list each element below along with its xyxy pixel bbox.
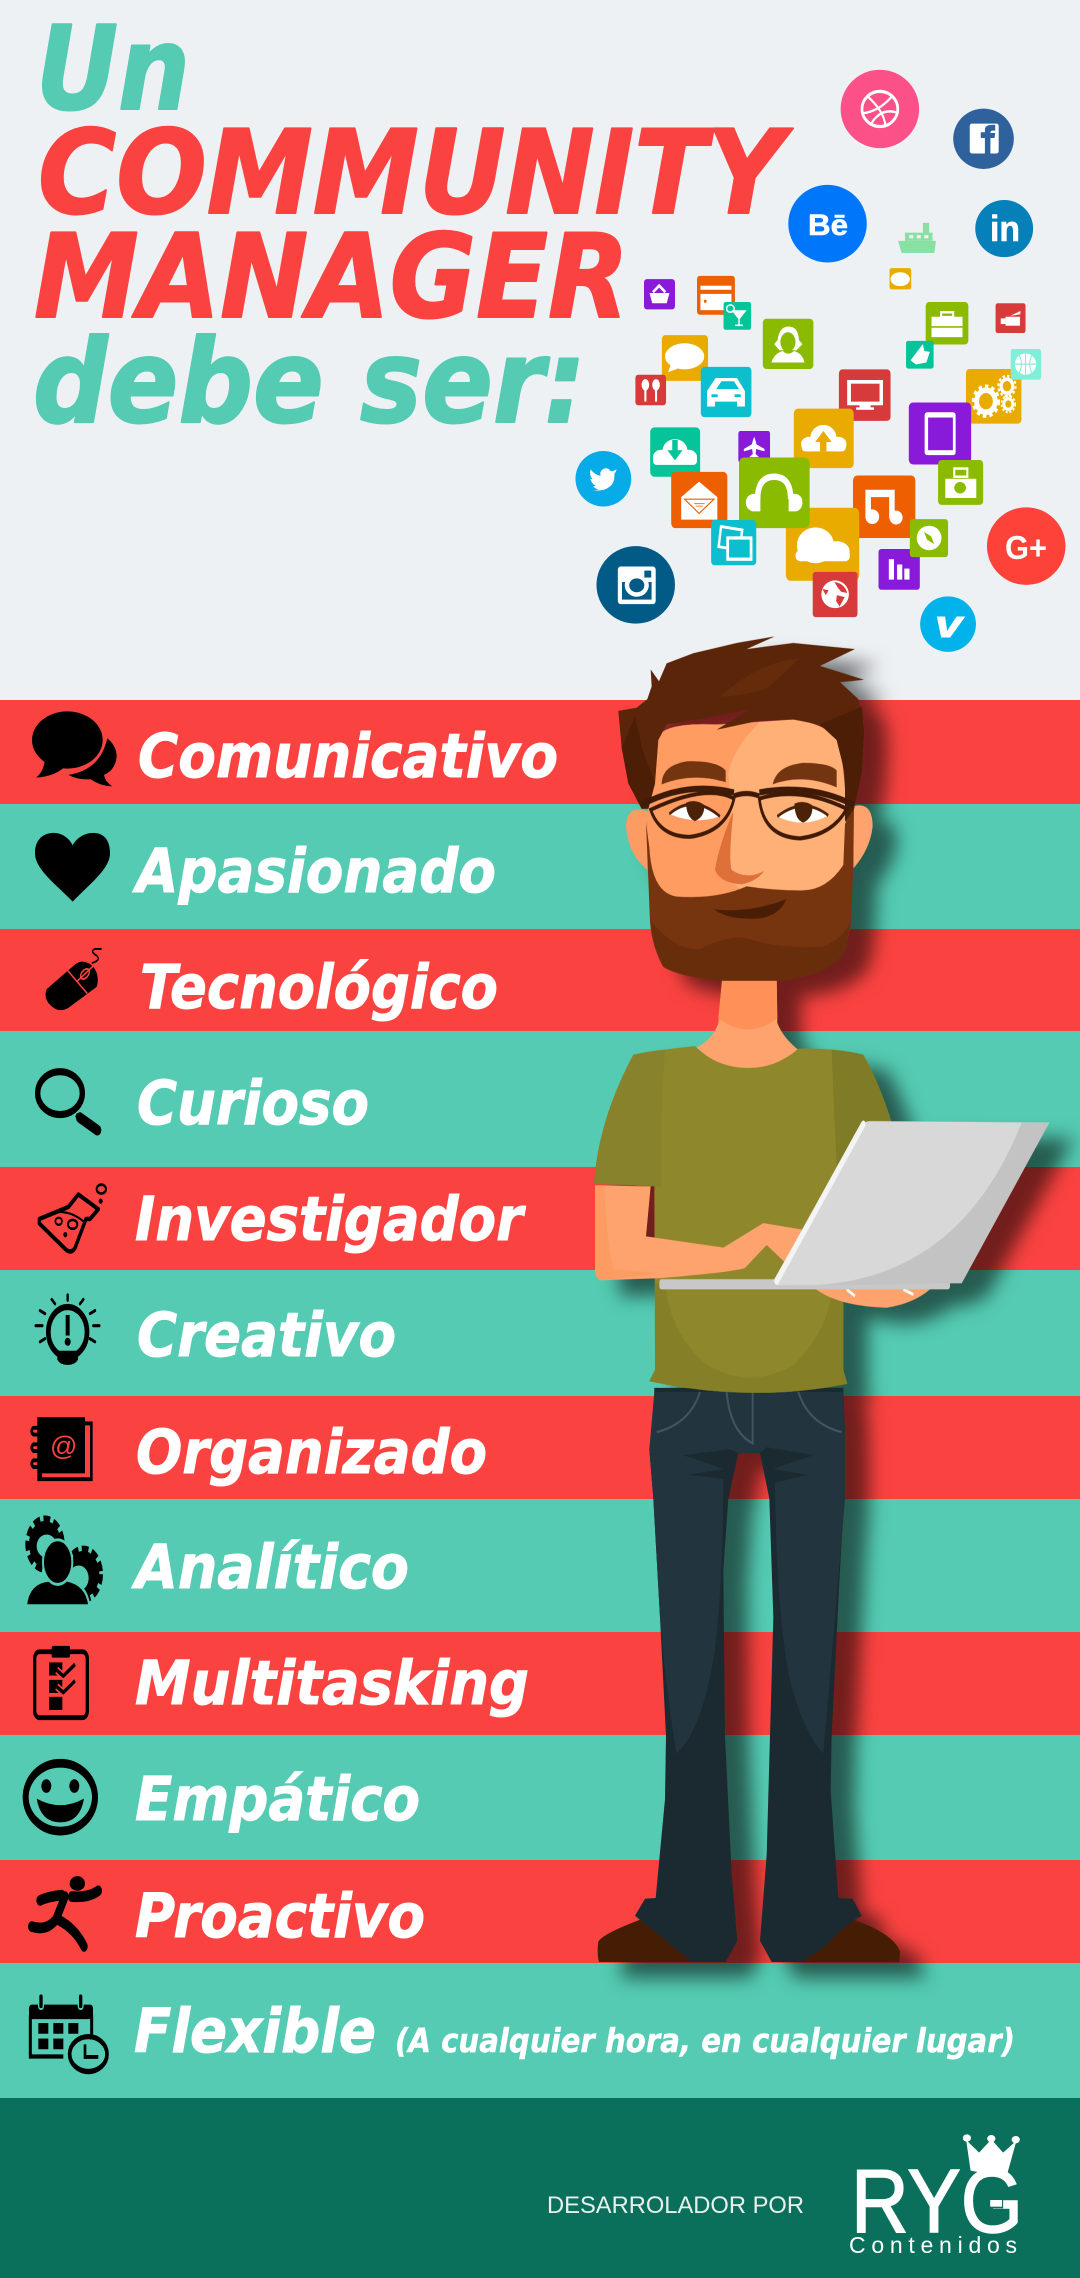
icon: cocktail — [724, 302, 751, 330]
right ear — [853, 805, 873, 868]
footer credit text: DESARROLADOR POR — [547, 2192, 804, 2219]
icon: computer mouse — [46, 949, 102, 1010]
label: Behance mark: Bē — [808, 209, 848, 242]
icon: compass — [910, 519, 948, 557]
icon: dribbble — [841, 70, 919, 148]
glasses — [642, 789, 853, 838]
icon: facebook — [953, 109, 1014, 169]
icon: light bulb — [36, 1295, 99, 1365]
icon: basket — [644, 279, 675, 309]
icon: camera — [938, 460, 983, 505]
icon: clipboard checklist — [35, 1646, 87, 1718]
icon: envelope — [671, 472, 727, 528]
row label: Empático: Empático — [135, 1764, 420, 1835]
legs and shoes — [598, 1388, 900, 1962]
icon: basketball — [1011, 349, 1041, 380]
icon: camcorder — [996, 303, 1026, 333]
icon: headphones — [739, 458, 810, 528]
row label: Multitasking: Multitasking — [135, 1648, 529, 1719]
icon: flask — [39, 1185, 106, 1251]
logo: RYG Contenidos: Contenidos — [849, 2232, 1017, 2258]
row label: Tecnológico: Tecnológico — [140, 952, 498, 1023]
icon: chat bubbles — [32, 711, 117, 786]
icon: gears — [966, 369, 1021, 424]
row label: Flexible: Flexible — [134, 1996, 376, 2067]
icon: plane — [738, 431, 770, 462]
title line: COMMUNITY: COMMUNITY — [38, 106, 793, 241]
row label: Investigador: Investigador — [135, 1184, 526, 1255]
character: bearded man with laptop — [594, 636, 1049, 1962]
icon: magnifying glass — [38, 1072, 97, 1130]
icon: download cloud — [650, 427, 700, 477]
icon: monitor — [839, 369, 891, 421]
icon: cutlery — [635, 375, 666, 405]
row icons, upper group — [32, 711, 117, 1365]
row label: Comunicativo: Comunicativo — [138, 721, 558, 792]
icon: twitter — [575, 451, 631, 507]
icon: instagram — [596, 546, 675, 624]
icon: linkedin circle — [975, 200, 1033, 257]
icon text: at sign: @ — [50, 1431, 77, 1461]
title line: Un: Un — [36, 2, 190, 137]
icon: small speech bubble — [890, 268, 911, 289]
row label: Creativo: Creativo — [137, 1300, 396, 1371]
icon: briefcase — [926, 302, 968, 344]
icon: woman avatar — [763, 319, 813, 369]
icon: behance circle — [788, 185, 867, 262]
striped background bands — [0, 700, 1080, 2098]
label: Google Plus mark: G+ — [1005, 529, 1047, 566]
row label: Curioso: Curioso — [137, 1068, 369, 1139]
icon: person with gears — [26, 1519, 101, 1606]
icon: music note — [853, 476, 915, 538]
logo: RYG Contenidos: RYG — [851, 2152, 1023, 2252]
icon: globe — [813, 572, 857, 617]
row label: Proactivo: Proactivo — [135, 1881, 425, 1952]
eyes — [669, 804, 720, 820]
shirt — [594, 1046, 892, 1393]
label: LinkedIn mark: in — [990, 208, 1020, 249]
supporting hand — [813, 1287, 930, 1308]
icon cloud: social and app icons — [575, 70, 1065, 652]
row label: Apasionado: Apasionado — [132, 836, 496, 907]
title line: debe ser: debe ser: — [33, 315, 586, 450]
icon: tablet — [909, 402, 971, 464]
upper body, head and laptop — [594, 636, 1049, 1393]
icon: car — [701, 367, 751, 417]
row label: Organizado: Organizado — [136, 1417, 487, 1488]
left ear — [626, 809, 647, 870]
icon: ship — [898, 223, 936, 253]
icon: running person — [32, 1876, 98, 1946]
hair — [618, 636, 864, 822]
footer band — [0, 2098, 1080, 2278]
title line: MANAGER: MANAGER — [34, 210, 629, 345]
icon: photos — [711, 520, 756, 565]
icon: bars chart — [878, 549, 920, 590]
row note: flexible schedule: (A cualquier hora, en cualquier lugar) — [395, 2021, 1015, 2060]
row icons, lower group — [26, 1417, 107, 2072]
beard — [646, 806, 854, 981]
icon: smiley face — [26, 1763, 95, 1831]
icon: heart — [35, 833, 110, 902]
icon: cloud — [786, 508, 859, 581]
face — [647, 719, 846, 911]
row label: Analítico: Analítico — [131, 1532, 409, 1603]
title — [33, 2, 793, 450]
neck — [697, 977, 800, 1072]
icon: credit card — [697, 276, 735, 315]
laptop — [659, 1121, 1049, 1289]
icon: upload cloud — [794, 409, 854, 468]
icon: thumbs up — [906, 341, 934, 369]
label: Vimeo mark: v — [935, 604, 964, 646]
icon: vimeo circle — [920, 596, 976, 652]
eyebrows — [662, 761, 726, 784]
nose — [715, 811, 764, 884]
icon: calendar with clock — [29, 1993, 107, 2072]
icon: speech bubble — [662, 335, 708, 381]
mouth — [714, 899, 787, 919]
arm — [595, 1185, 803, 1280]
icon: address book — [32, 1417, 91, 1481]
icon: google plus circle — [987, 507, 1065, 585]
